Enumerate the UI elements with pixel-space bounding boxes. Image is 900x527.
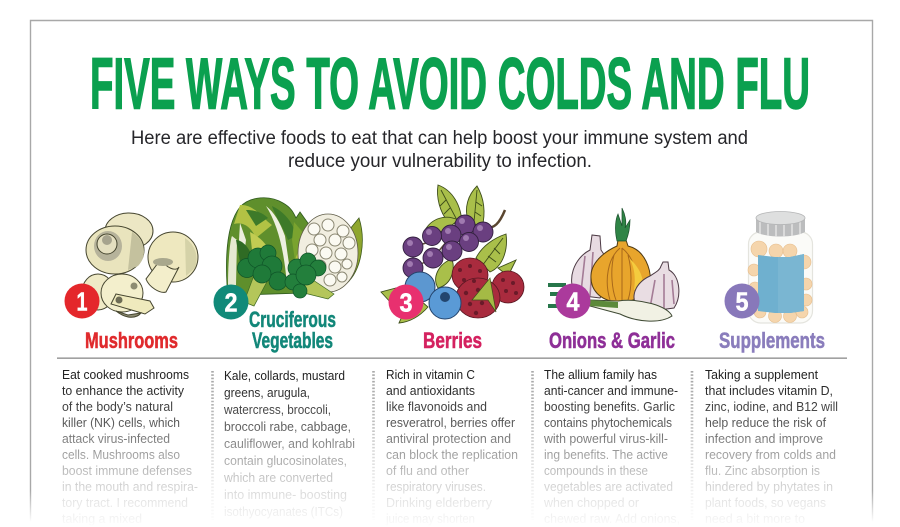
text block: berries: respiratory viruses. — [386, 480, 486, 494]
text block: cruciferous vegetables: into immune- boosting — [224, 488, 347, 502]
subtitle: reduce your vulnerability to infection. — [288, 151, 592, 172]
column 4: onions and garlic — [548, 208, 679, 353]
text block: mushrooms: boost immune defenses — [62, 464, 192, 478]
text block: onions and garlic: compounds in these — [544, 464, 648, 478]
text block: cruciferous vegetables: contain glucosinolates, — [224, 454, 347, 468]
text block: supplements: that includes vitamin D, — [705, 384, 833, 398]
text block: mushrooms: of the body’s natural — [62, 400, 173, 414]
text block: supplements: zinc, iodine, and B12 will — [705, 400, 838, 414]
icon: cruciferous vegetables — [226, 198, 362, 306]
text block: mushrooms: Eat cooked mushrooms — [62, 368, 189, 382]
heading: onions and garlic: Onions & Garlic — [549, 328, 675, 353]
number badge 5: 5 — [736, 286, 748, 316]
heading: cruciferous vegetables — [249, 307, 336, 353]
text block: supplements: need a bit more to — [705, 512, 805, 526]
heading: cruciferous vegetables: Cruciferous — [249, 307, 336, 332]
column 1: mushrooms — [64, 213, 198, 353]
text block: mushrooms: cells. Mushrooms also — [62, 448, 180, 462]
text block: cruciferous vegetables: which are converted — [223, 471, 333, 485]
text block: onions and garlic — [543, 368, 680, 526]
text block: cruciferous vegetables: greens, arugula, — [224, 386, 310, 400]
text block: berries: antiviral protection and — [386, 432, 511, 446]
text block: onions and garlic: when chopped or — [543, 496, 639, 510]
icon: supplement bottle — [748, 212, 812, 323]
text block: cruciferous vegetables: broccoli rabe, cabbage, — [224, 420, 351, 434]
number badge 3: 3 — [400, 288, 412, 318]
number badge 5 — [724, 284, 760, 318]
icon: berries — [381, 185, 524, 323]
text block: mushrooms: attack virus-infected — [62, 432, 170, 446]
text block: onions and garlic: contains phytochemicals — [544, 416, 672, 430]
text block: supplements: Taking a supplement — [705, 368, 818, 382]
text block: onions and garlic: The allium family has — [544, 368, 657, 382]
text block: supplements: help reduce the risk of — [705, 416, 826, 430]
text block: berries: Rich in vitamin C — [386, 368, 475, 382]
text block: supplements: hindered by phytates in — [705, 480, 833, 494]
column 3: berries — [381, 185, 524, 353]
heading: cruciferous vegetables: Vegetables — [252, 328, 333, 353]
subtitle — [131, 128, 748, 172]
number badge 4: 4 — [566, 286, 580, 316]
text block: onions and garlic: chewed raw. Add onions, — [544, 512, 680, 526]
text block: berries: juice may shorten — [385, 512, 475, 526]
text block: onions and garlic: boosting benefits. Garlic — [544, 400, 675, 414]
heading: berries: Berries — [423, 328, 482, 353]
text block: berries — [385, 368, 518, 526]
icon: mushrooms — [82, 213, 198, 317]
text block: supplements — [705, 368, 838, 526]
column 2: cruciferous vegetables — [214, 198, 362, 353]
text block: mushrooms: taking a mixed — [62, 512, 142, 526]
text block: onions and garlic: with powerful virus-kill- — [543, 432, 668, 446]
text block: berries: and antioxidants — [386, 384, 475, 398]
text block: berries: of flu and other — [386, 464, 469, 478]
text block: mushrooms: killer (NK) cells, which — [62, 416, 180, 430]
number badge 2: 2 — [224, 288, 238, 318]
text block: supplements: infection and improve — [705, 432, 823, 446]
text block: onions and garlic: ing benefits. The active — [544, 448, 668, 462]
text block: supplements: flu. Zinc absorption is — [705, 464, 820, 478]
text block: mushrooms: to enhance the activity — [62, 384, 185, 398]
text block: cruciferous vegetables: watercress, broccoli, — [223, 403, 331, 417]
heading: supplements: Supplements — [719, 328, 825, 353]
text block: berries: can block the replication — [386, 448, 518, 462]
text block: cruciferous vegetables — [223, 369, 355, 519]
heading: mushrooms: Mushrooms — [85, 328, 178, 353]
number badge 1: 1 — [76, 286, 88, 316]
icon: onions and garlic — [548, 208, 679, 321]
text block: onions and garlic: vegetables are activated — [544, 480, 673, 494]
column 5: supplements — [719, 212, 825, 353]
subtitle: Here are effective foods to eat that can help boost your immune system and — [131, 128, 748, 149]
number badge 4 — [556, 284, 590, 318]
text block: berries: Drinking elderberry — [386, 496, 493, 510]
text block: berries: like flavonoids and — [386, 400, 487, 414]
text block: cruciferous vegetables: Kale, collards, mustard — [224, 369, 345, 383]
number badge 3 — [388, 284, 424, 320]
text block: mushrooms: in the mouth and respira- — [62, 480, 198, 494]
text block: onions and garlic: anti-cancer and immune- — [544, 384, 678, 398]
text block: supplements: plant foods, so vegans — [705, 496, 826, 510]
text block: cruciferous vegetables: isothyocyanates (ITCs) — [224, 505, 343, 519]
dotted separators — [212, 371, 692, 520]
number badge 2 — [214, 284, 248, 320]
text block: cruciferous vegetables: cauliflower, and kohlrabi — [224, 437, 355, 451]
divider — [57, 358, 847, 359]
text block: mushrooms: tory tract. I recommend — [62, 496, 188, 510]
text block: mushrooms — [62, 368, 198, 526]
text block: berries: resveratrol, berries offer — [386, 416, 515, 430]
text block: supplements: recovery from colds and — [705, 448, 836, 462]
